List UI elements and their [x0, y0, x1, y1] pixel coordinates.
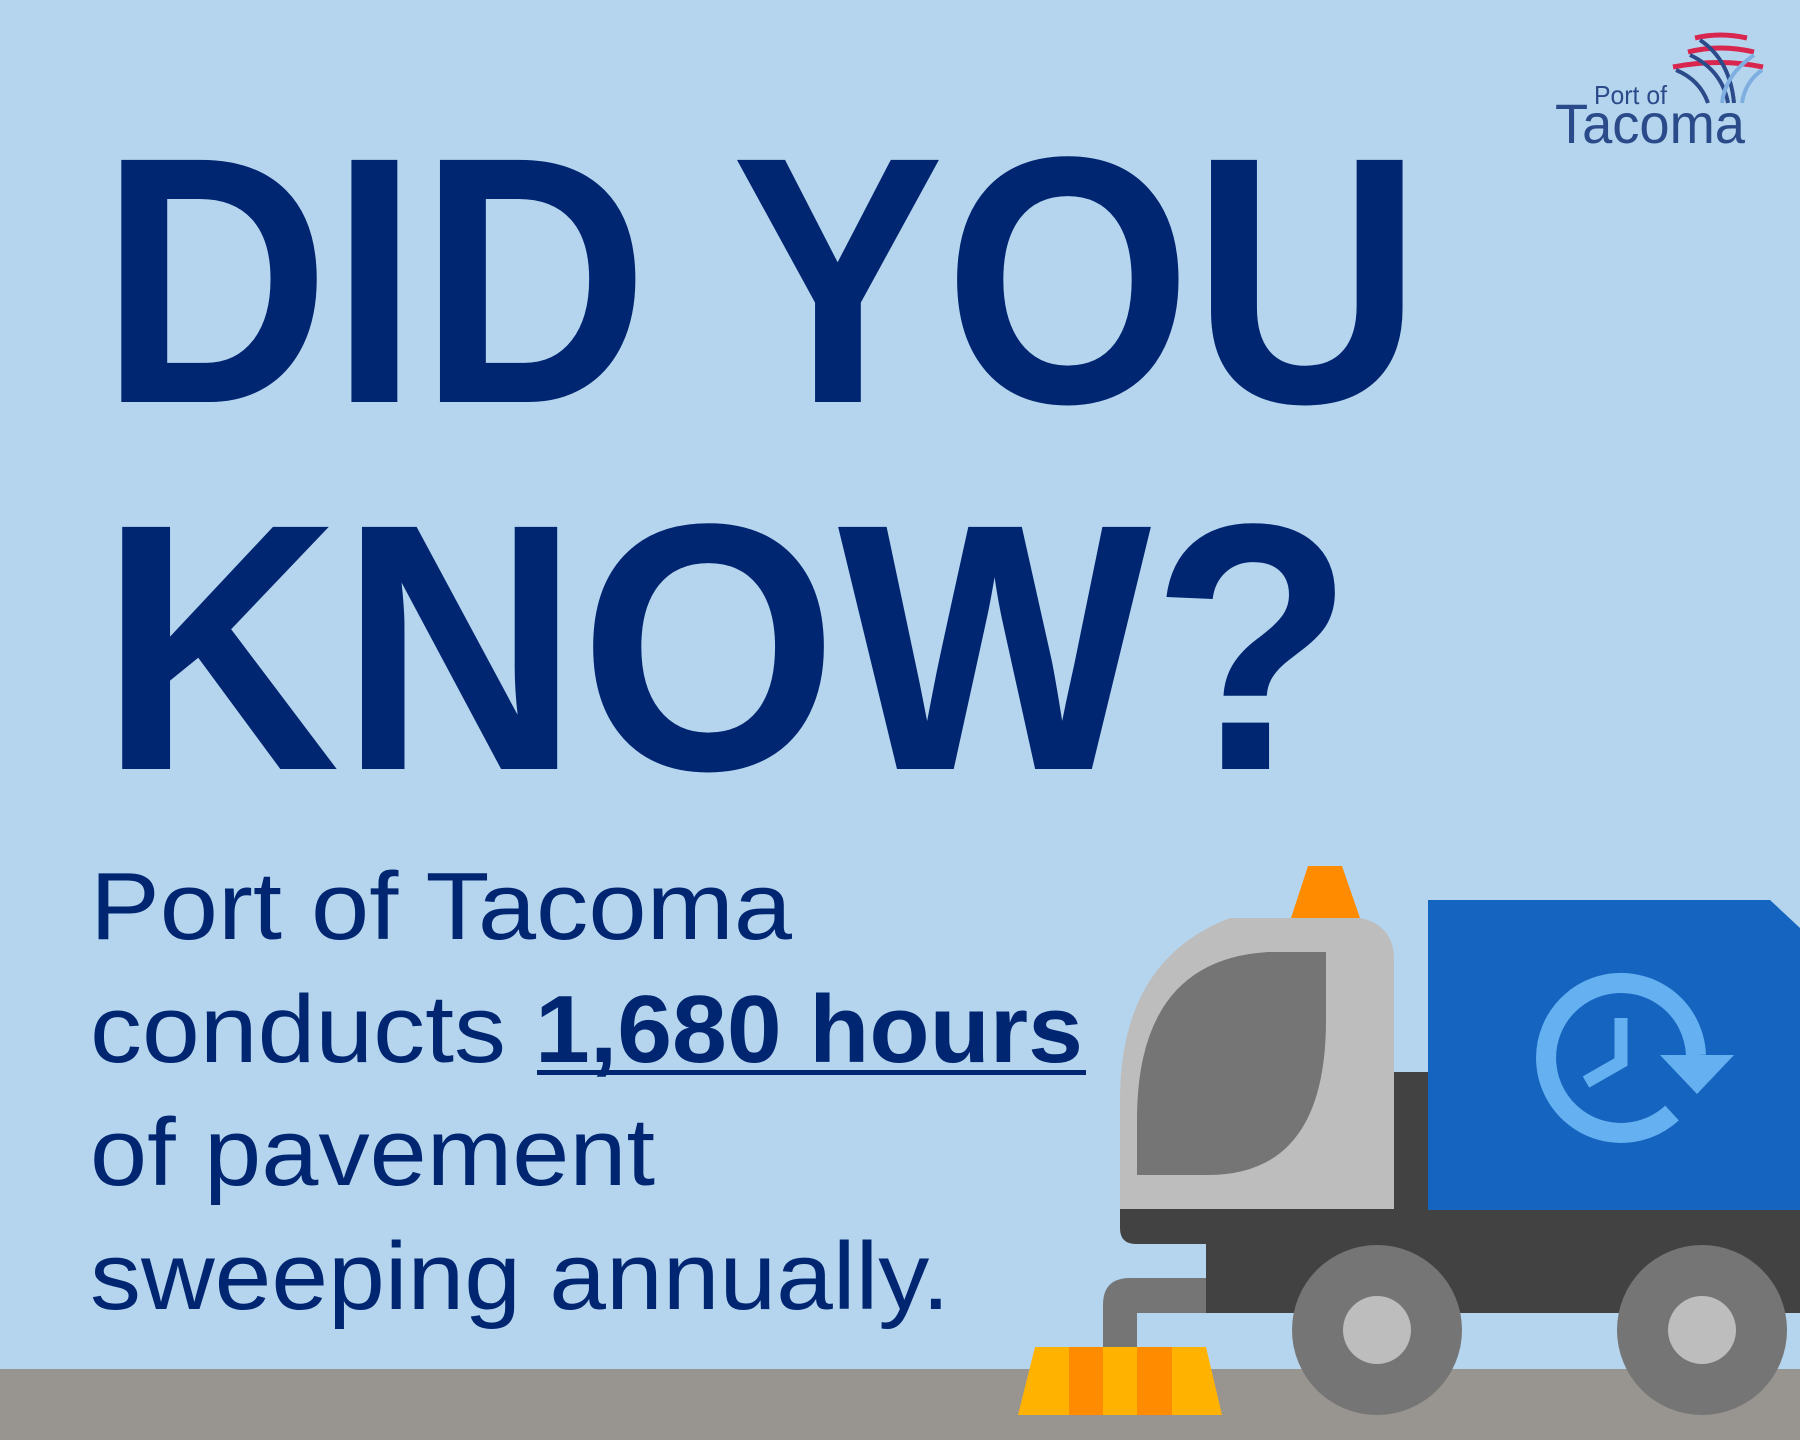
body text: of pavement	[90, 1099, 655, 1206]
broom arm	[1103, 1278, 1206, 1347]
body text: Port of Tacoma	[90, 853, 793, 960]
icon: clock with arrow	[1546, 983, 1696, 1133]
cargo box	[1428, 900, 1800, 1210]
logo: Port of Tacoma: Tacoma	[1555, 92, 1746, 155]
window	[1137, 952, 1326, 1175]
beacon	[1291, 866, 1360, 918]
ground	[0, 1369, 1800, 1440]
body text	[90, 853, 1086, 1330]
body text: sweeping annually.	[90, 1223, 950, 1330]
logo: Port of Tacoma: Port of	[1594, 80, 1668, 110]
icon: street sweeper truck	[1018, 866, 1800, 1415]
broom	[1018, 1347, 1222, 1415]
body text: conducts	[90, 976, 506, 1083]
chassis	[1394, 1072, 1434, 1212]
cab	[1120, 918, 1394, 1209]
title: DID YOU KNOW?: KNOW?	[100, 450, 1354, 844]
highlight: 1,680 hours: 1,680 hours	[535, 976, 1083, 1083]
logo: Port of Tacoma	[1555, 35, 1763, 155]
title: DID YOU KNOW?: DID YOU	[100, 83, 1422, 477]
wheels	[1292, 1245, 1462, 1415]
title: DID YOU KNOW?	[100, 83, 1422, 844]
